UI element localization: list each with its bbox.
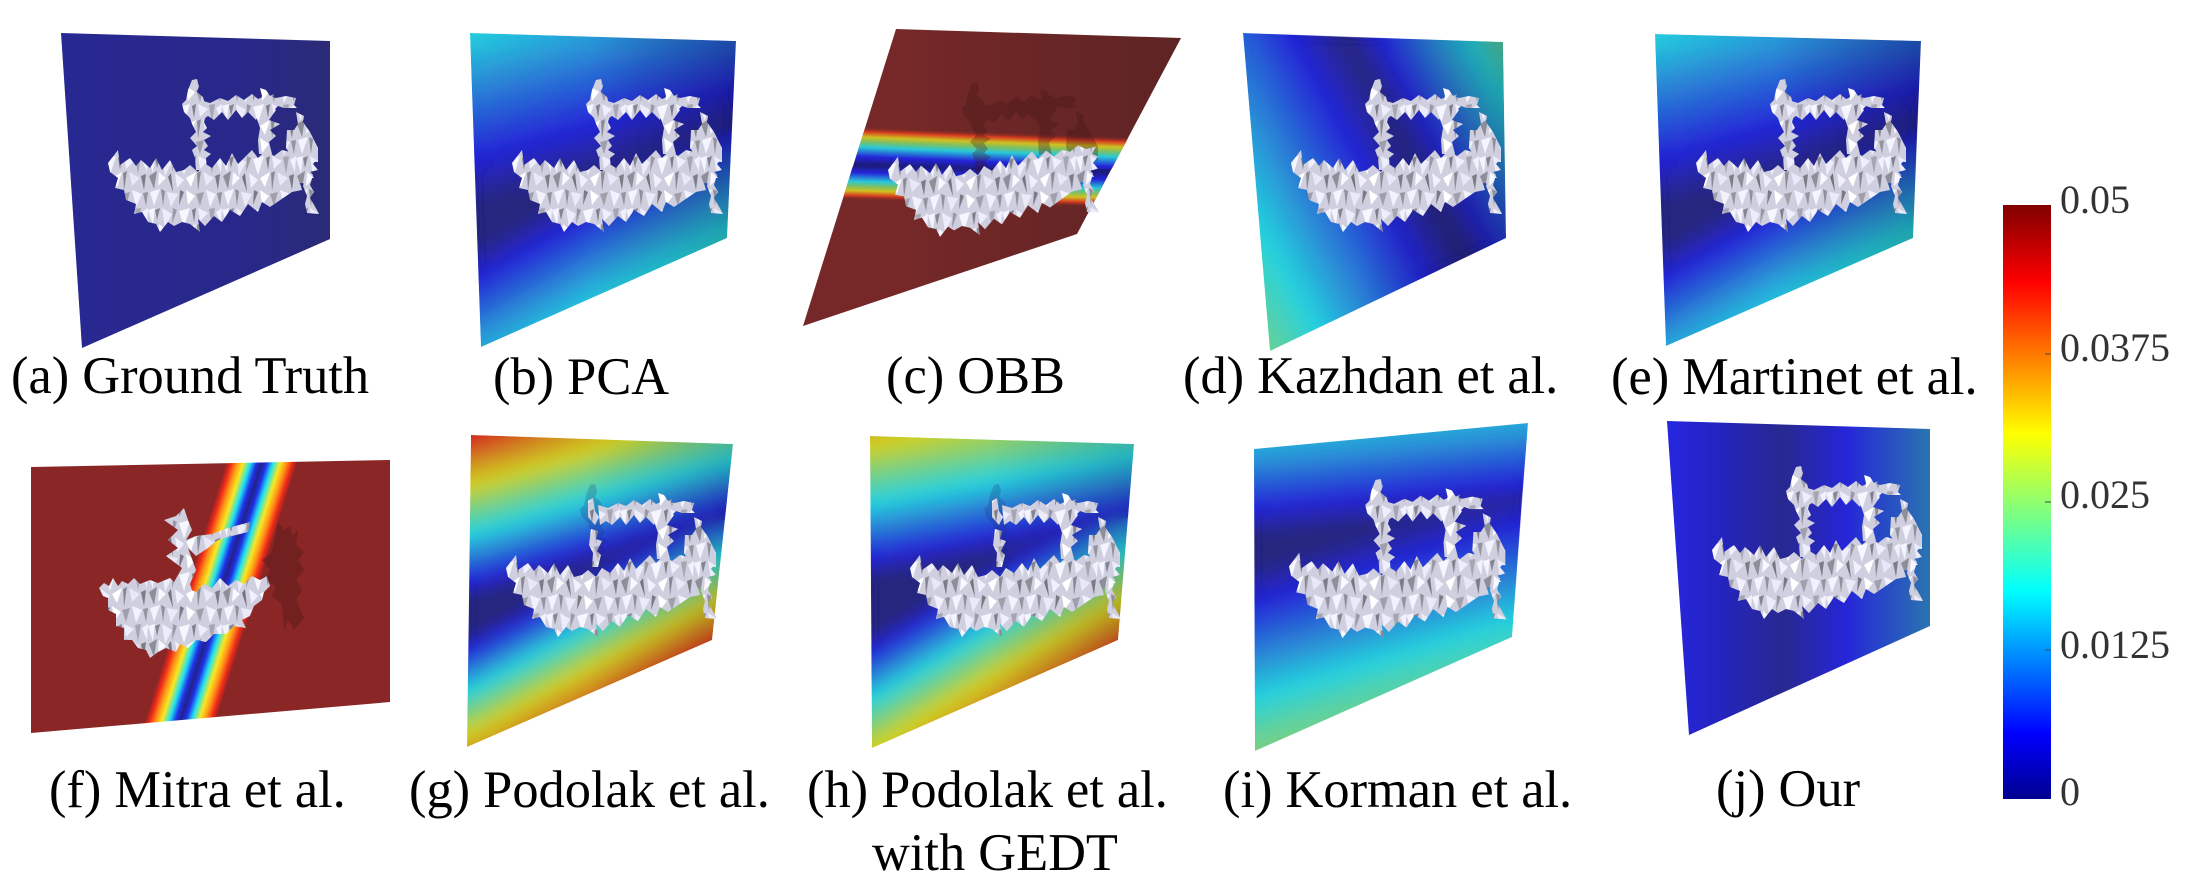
plane: Podolak GEDT error map bbox=[870, 436, 1134, 748]
boat mesh bbox=[1696, 79, 1907, 232]
plane: Mitra error map bbox=[31, 460, 390, 733]
panel: (i) Korman et al. bbox=[1223, 423, 1572, 819]
plane: our error map bbox=[1667, 421, 1930, 735]
caption a: (a) Ground Truth bbox=[11, 347, 369, 405]
plane: Kazhdan error map bbox=[1243, 33, 1506, 351]
panel: (f) Mitra et al. bbox=[31, 460, 390, 819]
caption c: (c) OBB bbox=[886, 347, 1065, 405]
caption e: (e) Martinet et al. bbox=[1611, 348, 1978, 406]
boat mesh with shadowed masts bbox=[888, 78, 1099, 239]
boat mesh bbox=[1289, 479, 1506, 638]
colorbar labels: 0.0375 bbox=[2060, 325, 2170, 370]
panel: (a) Ground Truth bbox=[11, 33, 369, 405]
panel: (g) Podolak et al. bbox=[409, 435, 770, 819]
panel: (c) OBB bbox=[803, 29, 1181, 405]
panel: (j) Our bbox=[1667, 421, 1930, 818]
caption b: (b) PCA bbox=[493, 348, 669, 406]
plane: ground truth symmetry plane bbox=[61, 33, 330, 348]
plane: Korman error map bbox=[1254, 423, 1528, 751]
caption h: with GEDT bbox=[872, 824, 1118, 882]
caption h: (h) Podolak et al. bbox=[807, 761, 1168, 819]
boat mesh bbox=[910, 484, 1121, 637]
boat hull bbox=[99, 576, 270, 658]
panel: (d) Kazhdan et al. bbox=[1183, 33, 1558, 405]
boat mesh bbox=[1712, 466, 1923, 619]
panel: (b) PCA bbox=[470, 33, 736, 406]
boat mast bbox=[164, 508, 250, 596]
caption d: (d) Kazhdan et al. bbox=[1183, 347, 1558, 405]
caption i: (i) Korman et al. bbox=[1223, 761, 1572, 819]
plane: Martinet error map bbox=[1655, 34, 1921, 346]
colorbar labels: 0 bbox=[2060, 769, 2080, 814]
colorbar labels: 0.0125 bbox=[2060, 622, 2170, 667]
panel: (e) Martinet et al. bbox=[1611, 34, 1978, 406]
caption j: (j) Our bbox=[1716, 760, 1860, 818]
boat mesh bbox=[512, 79, 723, 232]
plane: Podolak error map bbox=[467, 435, 733, 747]
boat mesh bbox=[506, 484, 717, 637]
colorbar gradient bbox=[2003, 205, 2051, 799]
caption f: (f) Mitra et al. bbox=[49, 761, 346, 819]
colorbar labels: 0.025 bbox=[2060, 472, 2150, 517]
shadowed mast part bbox=[262, 522, 304, 630]
caption g: (g) Podolak et al. bbox=[409, 761, 770, 819]
boat mesh bbox=[1291, 79, 1502, 232]
plane: OBB error map bbox=[803, 29, 1181, 326]
colorbar legend bbox=[2003, 177, 2170, 814]
boat mesh bbox=[108, 79, 319, 232]
panel: (h) Podolak et al. with GEDT bbox=[807, 436, 1168, 882]
plane: PCA error map bbox=[470, 33, 736, 347]
colorbar labels bbox=[2060, 177, 2170, 814]
caption h bbox=[807, 761, 1168, 882]
colorbar labels: 0.05 bbox=[2060, 177, 2130, 222]
